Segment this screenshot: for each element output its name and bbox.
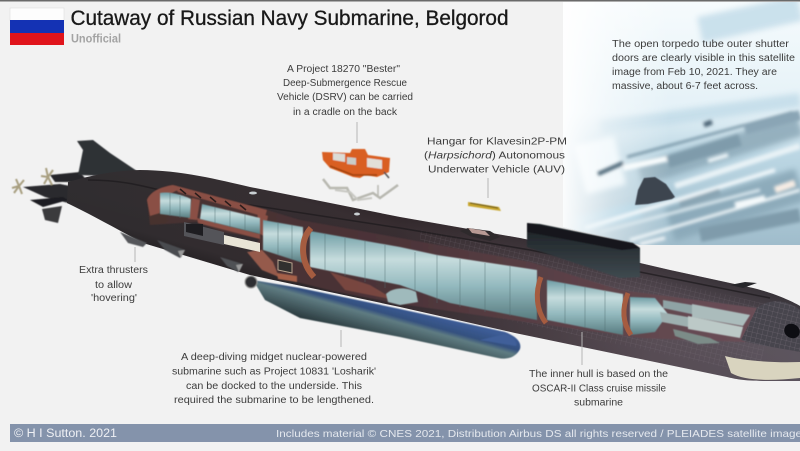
satellite image: [563, 2, 800, 247]
DSRV callout text: A Project 18270 "Bester": [287, 64, 400, 75]
Extra thrusters callout: Extra thrusters: [79, 265, 148, 276]
title: Cutaway of Russian Navy Submarine, Belgorod: [70, 7, 508, 30]
submarine cutaway: [12, 140, 800, 381]
Extra thrusters callout: to allow: [95, 280, 133, 291]
submarine: thrusters: [120, 232, 243, 272]
Hangar callout text: Hangar for Klavesin2P-PM: [427, 136, 567, 148]
submarine: tube ribs: [170, 193, 605, 332]
submarine: window in hull: [278, 260, 292, 273]
Losharik callout: required the submarine to be lengthened.: [174, 395, 374, 406]
leader line: Losharik: [340, 330, 342, 347]
DSRV callout text: Deep-Submergence Rescue: [283, 78, 407, 89]
submarine: gray machinery section: [184, 222, 260, 252]
leader line: inner hull: [581, 332, 583, 365]
Inner hull callout: [529, 369, 668, 408]
footer bar: [10, 424, 800, 442]
satellite caption: [612, 39, 795, 92]
submarine: orange frame rings: [303, 228, 631, 335]
submarine: hull deck line: [88, 180, 770, 298]
Hangar callout text: [424, 136, 567, 176]
submarine: inner pressure hull tubes: [160, 193, 750, 344]
submarine: bow hole: [782, 321, 800, 341]
DSRV callout text: Vehicle (DSRV) can be carried: [277, 92, 413, 103]
Extra thrusters callout: [79, 265, 148, 304]
submarine: tail fin: [77, 140, 137, 176]
submarine: bow plane: [730, 282, 757, 288]
submarine: hull: [67, 170, 800, 381]
submarine: hull mesh: [420, 230, 770, 375]
DSRV callout text: in a cradle on the back: [293, 107, 398, 118]
Losharik midget submarine: [245, 276, 520, 359]
subtitle: Unofficial: [71, 34, 121, 46]
submarine: pressure hull void: [147, 185, 757, 342]
Losharik callout: A deep-diving midget nuclear-powered: [181, 352, 367, 363]
submarine: sail: [527, 223, 640, 278]
flag of Russia: [10, 8, 64, 45]
Losharik callout: can be docked to the underside. This: [186, 381, 362, 392]
icon: DSRV cradle: [323, 179, 398, 200]
submarine: AUV hangar hatch: [460, 228, 500, 241]
Losharik callout: submarine such as Project 10831 'Losharik': [172, 366, 376, 378]
DSRV callout text: [277, 64, 413, 118]
Inner hull callout: submarine: [574, 398, 623, 408]
icon: AUV: [468, 202, 501, 211]
Hangar callout text: (Harpsichord ) Autonomous: [424, 150, 565, 162]
satellite caption: massive, about 6-7 feet across.: [612, 81, 758, 92]
credit: © H I Sutton. 2021: [14, 428, 117, 440]
Inner hull callout: The inner hull is based on the: [529, 369, 668, 380]
submarine: cream keel: [725, 356, 800, 380]
top edge strip: [0, 0, 800, 2]
Hangar callout text: Underwater Vehicle (AUV): [428, 164, 565, 176]
AUV leader line: [487, 178, 489, 198]
submarine: rust frames: [147, 185, 395, 300]
Extra thrusters callout: 'hovering': [91, 293, 137, 304]
dark ship shape: [635, 177, 675, 205]
submarine: nose mesh: [741, 301, 800, 352]
satellite caption: doors are clearly visible in this satellite: [612, 53, 795, 64]
icon: DSRV rescue vehicle: [322, 149, 390, 178]
submarine: stern propellers and planes: [12, 168, 90, 223]
Inner hull callout: OSCAR-II Class cruise missile: [532, 384, 666, 394]
satellite caption: The open torpedo tube outer shutter: [612, 39, 790, 50]
Losharik callout: [172, 352, 376, 406]
leader line: thrusters: [134, 247, 136, 262]
DSRV leader line: [356, 122, 358, 143]
footer bar: Includes material © CNES 2021, Distribution Airbus DS all rights reserved / PLEIADES satellite image: [276, 428, 800, 440]
satellite caption: image from Feb 10, 2021. They are: [612, 67, 777, 78]
submarine: rib marks: [180, 189, 246, 210]
submarine: hull highlights: [249, 192, 360, 216]
